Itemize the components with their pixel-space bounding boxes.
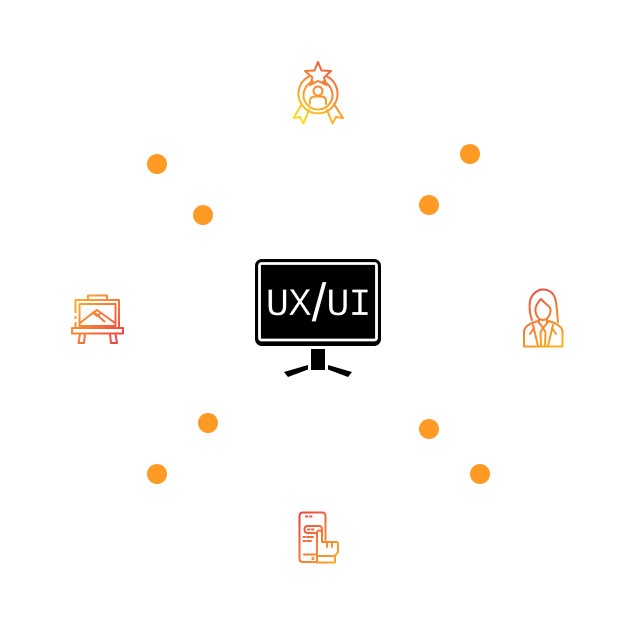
monitor label: / bbox=[311, 273, 327, 333]
icon: award medal bbox=[294, 62, 343, 124]
monitor label: I bbox=[348, 283, 372, 327]
monitor label: U bbox=[266, 283, 289, 327]
monitor screen bbox=[255, 259, 381, 346]
orange dots bbox=[147, 144, 490, 484]
monitor label: X bbox=[288, 283, 312, 327]
icon: phone with pointing hand bbox=[300, 512, 338, 562]
central monitor: UX/UI bbox=[255, 259, 381, 377]
icon: businesswoman bbox=[524, 290, 562, 346]
monitor label: U bbox=[326, 283, 350, 327]
monitor stand bbox=[284, 349, 352, 377]
icon: painting easel bbox=[72, 296, 123, 343]
